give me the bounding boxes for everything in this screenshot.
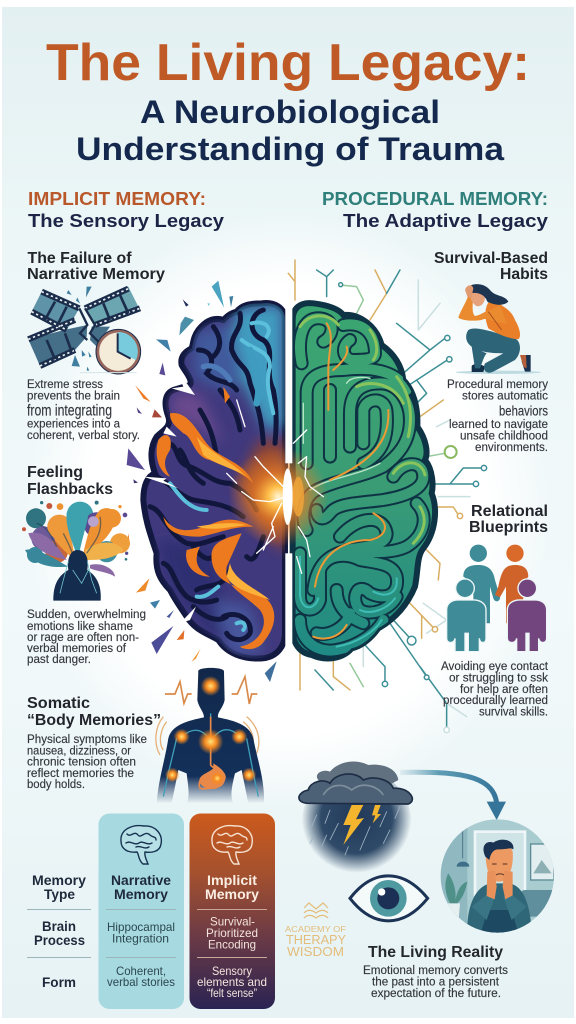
circuit lines around the right hemisphere <box>288 260 487 733</box>
block: relational blueprints <box>441 503 549 719</box>
heading <box>27 250 165 283</box>
body text: body holds. <box>27 777 85 791</box>
heading: Blueprints <box>469 519 548 536</box>
logo: academy of therapy wisdom: ACADEMY OF <box>285 924 346 934</box>
arrow: past to future <box>400 772 506 820</box>
icon: narrative brain <box>121 826 161 864</box>
heading <box>434 250 548 283</box>
table row: memory type: Implicit <box>207 872 257 888</box>
title: The Living Legacy: <box>46 34 530 92</box>
body text <box>27 732 147 791</box>
table row: brain process: Brain <box>42 918 76 934</box>
table row: memory type <box>32 872 259 902</box>
heading: “Body Memories” <box>27 712 161 729</box>
table row: memory type: Narrative <box>111 872 171 888</box>
body text: Avoiding eye contact <box>441 659 549 673</box>
body text: Procedural memory <box>447 377 549 391</box>
logo: academy of therapy wisdom <box>285 903 346 959</box>
table row: form: elements and <box>197 975 267 989</box>
orange flames <box>157 387 274 649</box>
logo: academy of therapy wisdom: WISDOM <box>287 944 344 959</box>
body text <box>363 963 508 1000</box>
heading: Survival-Based <box>434 250 548 267</box>
body text <box>447 377 549 454</box>
body text <box>27 607 146 666</box>
body text: from integrating <box>27 403 112 420</box>
left hemisphere: chaotic <box>143 303 285 659</box>
table row: brain process: Integration <box>112 932 169 946</box>
heading: The Living Reality <box>368 944 503 961</box>
heading <box>27 464 113 498</box>
subtitle: A Neurobiological <box>140 94 440 130</box>
body text: expectation of the future. <box>371 986 501 1000</box>
block: survival-based habits <box>434 250 549 454</box>
card: implicit memory <box>190 814 275 1009</box>
icon: eye <box>350 876 428 921</box>
body text: Physical symptoms like <box>27 732 147 746</box>
lightning cracks <box>227 400 323 573</box>
body text: learned to navigate <box>449 417 548 431</box>
table row: form: Form <box>42 974 76 990</box>
card: narrative memory <box>98 814 184 1009</box>
body text: unsafe childhood <box>460 428 548 442</box>
heading: Habits <box>500 266 548 283</box>
table row: brain process: Survival- <box>210 915 255 929</box>
body text: emotions like shame <box>27 619 133 633</box>
heading: Somatic <box>27 695 90 712</box>
body text: environments. <box>475 440 548 454</box>
heading: procedural memory: The Adaptive Legacy <box>343 210 549 231</box>
block: feeling flashbacks <box>22 464 146 666</box>
heading: Relational <box>471 503 548 520</box>
body text: behaviors <box>499 403 548 419</box>
body text: survival skills. <box>479 705 548 719</box>
body text: or rage are often non- <box>27 630 139 644</box>
right hemisphere: structured pathways <box>293 303 435 658</box>
table row: memory type: Memory <box>205 886 259 902</box>
icon: anxious man in a room <box>441 819 560 937</box>
brain illustration <box>127 281 435 682</box>
table row: memory type: Memory <box>32 872 86 888</box>
icon: kneeling woman holding her head <box>456 284 541 374</box>
body text: nausea, dizziness, or <box>27 744 131 758</box>
table row: brain process: Prioritized <box>206 926 258 940</box>
body text: stores automatic <box>462 388 548 402</box>
body text: for help are often <box>460 682 548 696</box>
heading: implicit memory: IMPLICIT MEMORY: <box>28 188 206 209</box>
subtitle <box>76 94 504 167</box>
heading <box>27 695 161 729</box>
blue highlights <box>170 322 273 630</box>
body text: Sudden, overwhelming <box>27 607 146 621</box>
icon: broken film and clock <box>28 287 141 374</box>
table row: brain process: Hippocampal <box>107 920 175 934</box>
dark folds left <box>150 310 276 640</box>
body text <box>27 377 140 442</box>
body text: experiences into a <box>27 416 120 430</box>
icon: implicit brain <box>212 826 252 864</box>
subtitle: Understanding of Trauma <box>76 131 504 167</box>
body text: procedurally learned <box>443 693 548 707</box>
centre burst <box>143 303 328 657</box>
icon: glowing human body <box>156 668 264 803</box>
title <box>46 34 530 167</box>
body text: Extreme stress <box>27 377 103 391</box>
table row: form: Coherent, <box>116 964 166 978</box>
heading: implicit memory <box>28 188 225 231</box>
table row: form <box>42 964 267 1000</box>
body text: coherent, verbal story. <box>27 428 140 442</box>
table row: brain process: Encoding <box>208 938 256 952</box>
table row: brain process: Process <box>34 932 85 948</box>
comparison table <box>27 814 275 1009</box>
table row: form: Sensory <box>212 964 252 978</box>
heading: Feeling <box>27 464 83 481</box>
block: somatic body memories <box>27 668 264 803</box>
block: failure of narrative memory <box>27 250 165 442</box>
body text: chronic tension often <box>27 754 136 768</box>
table row: form: verbal stories <box>107 975 175 989</box>
body text: the past into a persistent <box>372 975 500 989</box>
heading: procedural memory <box>322 188 549 231</box>
body text: or struggling to ssk <box>449 671 549 685</box>
body text: reflect memories the <box>27 766 134 780</box>
table row: brain process <box>34 915 258 952</box>
shards <box>127 281 277 682</box>
heading: procedural memory: PROCEDURAL MEMORY: <box>322 188 548 209</box>
icon: logo mark <box>304 903 328 918</box>
table row: memory type: Memory <box>114 886 168 902</box>
icon: emotional swirl over head in hands <box>22 501 130 601</box>
body text <box>441 659 549 719</box>
icon: storm cloud <box>299 762 412 878</box>
heading <box>469 503 548 536</box>
body text: verbal memories of <box>27 641 127 655</box>
heading: The Failure of <box>28 250 132 267</box>
body text: Emotional memory converts <box>363 963 508 977</box>
icon: four people <box>447 545 547 652</box>
table row: memory type: Type <box>44 886 75 902</box>
logo: academy of therapy wisdom: THERAPY <box>286 932 346 947</box>
body text: prevents the brain <box>27 388 120 402</box>
shatter gashes <box>143 367 196 623</box>
block: the living reality <box>299 762 560 1000</box>
body text: past danger. <box>27 652 91 666</box>
table row: form: “felt sense” <box>207 986 257 1000</box>
heading: implicit memory: The Sensory Legacy <box>28 210 225 231</box>
heading: Narrative Memory <box>27 266 165 283</box>
heading: Flashbacks <box>27 481 113 498</box>
